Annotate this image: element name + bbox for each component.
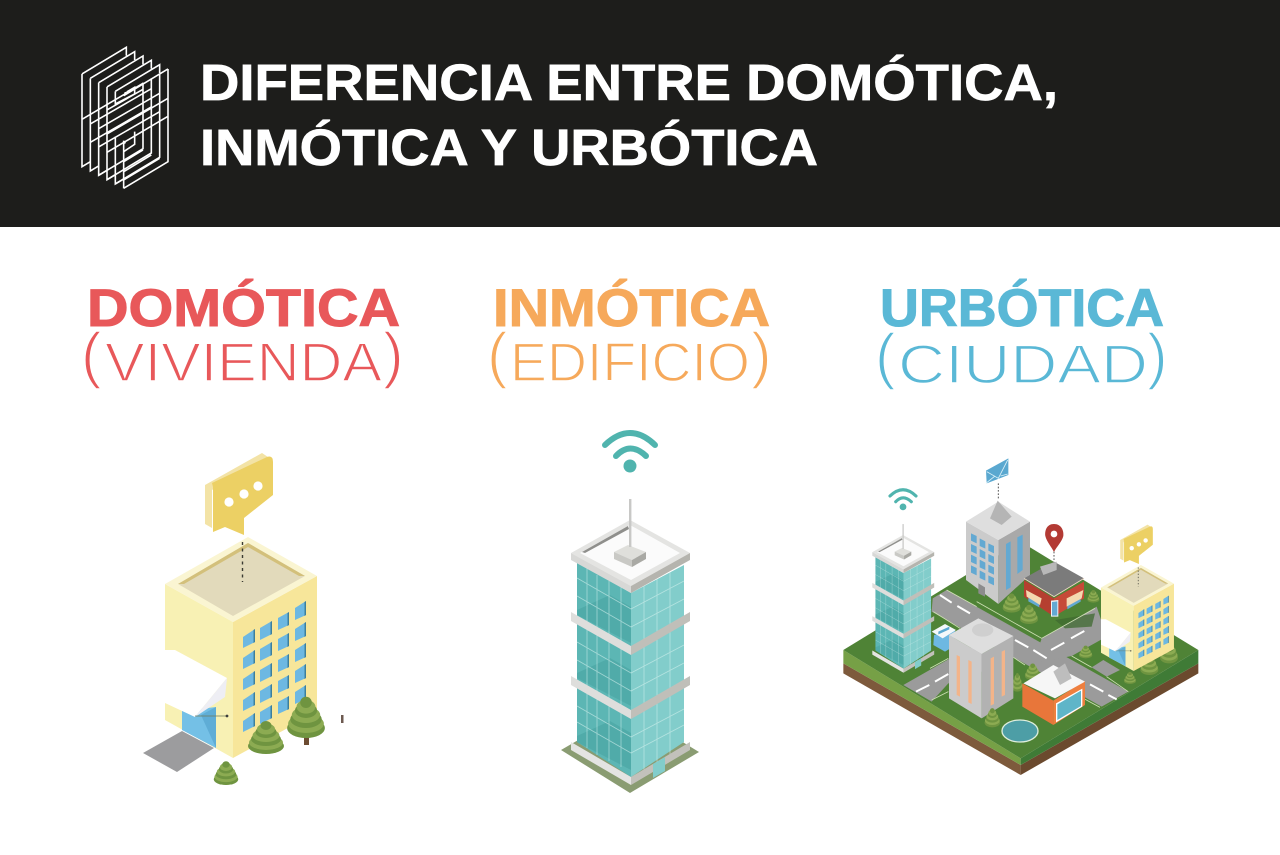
building: grey office with mail icon [966, 458, 1030, 604]
title: DIFERENCIA ENTRE DOMÓTICA, [200, 54, 1058, 111]
column heading: urbótica: ( [875, 322, 896, 391]
trees [1003, 590, 1178, 692]
illustration: smart city block [843, 458, 1198, 775]
column heading: urbótica: CIUDAD [898, 333, 1148, 395]
logo icon [82, 47, 168, 188]
illustration: yellow residential building [143, 453, 344, 785]
building: red shop with map pin [1024, 524, 1084, 617]
column heading: urbótica [875, 278, 1168, 395]
column heading: domótica: ( [81, 321, 102, 390]
title: INMÓTICA Y URBÓTICA [200, 119, 818, 176]
column heading: inmótica: ) [751, 321, 772, 390]
column heading: domótica: DOMÓTICA [87, 278, 400, 338]
title [200, 54, 1058, 176]
small glass kiosk [932, 624, 956, 652]
column heading: inmótica: ( [487, 321, 508, 390]
column heading: domótica: VIVIENDA [105, 331, 382, 393]
column heading: domótica: ) [383, 321, 404, 390]
header band [0, 0, 1280, 227]
column heading: inmótica: INMÓTICA [493, 278, 770, 338]
column heading: urbótica: ) [1147, 322, 1168, 391]
column heading: inmótica [487, 278, 772, 393]
city yellow building [1101, 525, 1174, 671]
building: grey tower with orange stripes [949, 618, 1013, 718]
pond [1002, 720, 1038, 742]
city glass tower [872, 490, 934, 673]
column heading: urbótica: URBÓTICA [880, 278, 1164, 338]
illustration: glass office tower with wifi [561, 433, 699, 793]
column heading: domótica [81, 278, 404, 393]
building: orange shop [1022, 663, 1085, 725]
column heading: inmótica: EDIFICIO [510, 331, 750, 393]
